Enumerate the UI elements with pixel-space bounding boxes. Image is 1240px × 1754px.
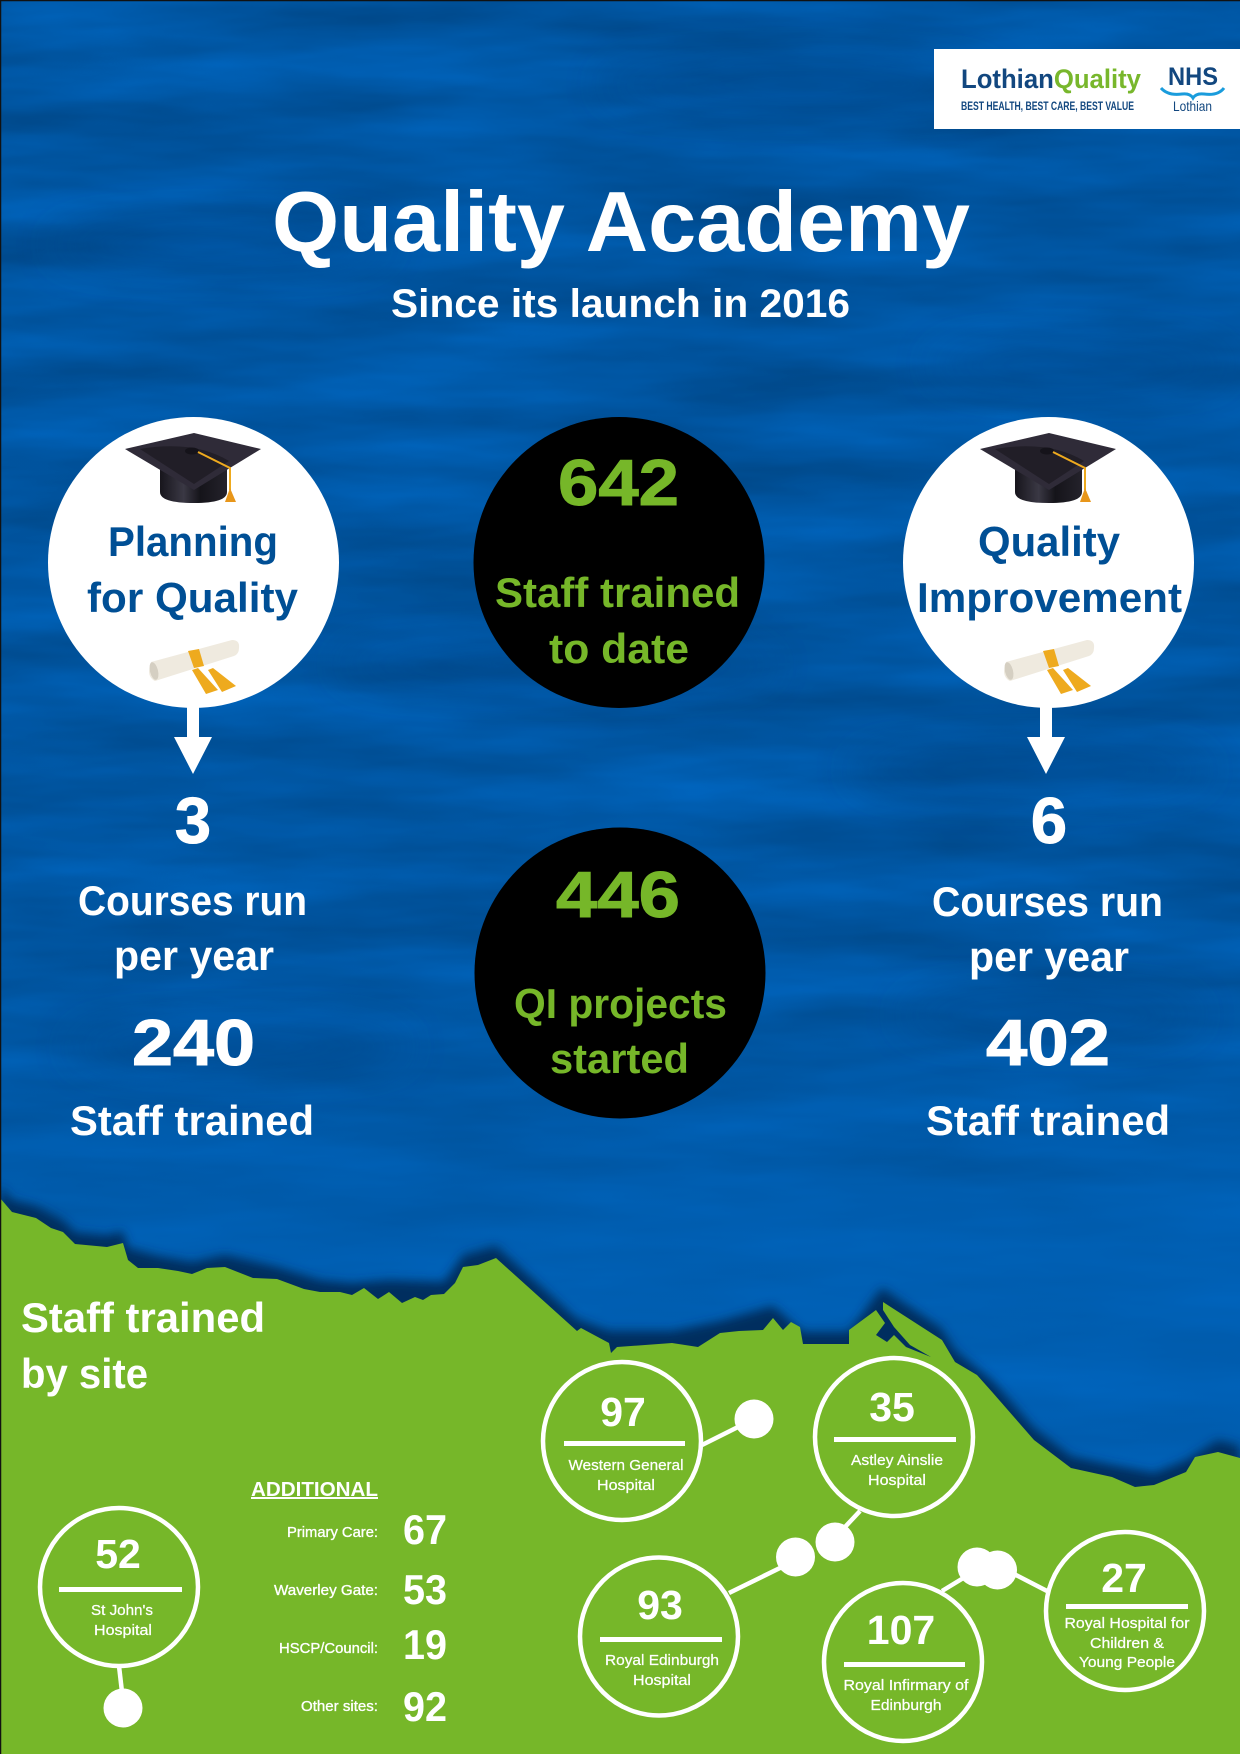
- site: Astley Ainslie Hospital: Astley Ainslie: [851, 1452, 943, 1469]
- row: Waverley Gate: [274, 1566, 447, 1613]
- logo: wave: [1161, 88, 1224, 98]
- site: St John's Hospital: [40, 1508, 198, 1728]
- row: Primary Care: [287, 1506, 447, 1553]
- label: courses run per year: Courses run: [932, 878, 1163, 925]
- label: Staff trained to date: to date: [549, 625, 689, 672]
- row: Primary Care: 67: [403, 1506, 447, 1553]
- heading: ADDITIONAL: ADDITIONAL: [251, 1479, 378, 1501]
- site: Astley Ainslie Hospital: Hospital: [868, 1472, 926, 1489]
- site: St John's Hospital: 52: [95, 1531, 141, 1577]
- label: QI projects started: started: [550, 1035, 689, 1082]
- logo panel: [934, 49, 1240, 129]
- site: Astley Ainslie Hospital: [815, 1358, 973, 1562]
- site: St John's Hospital: Hospital: [94, 1622, 152, 1639]
- icon: diploma scroll: [1003, 640, 1094, 694]
- row: Other sites: [301, 1683, 447, 1730]
- logo: tagline: BEST HEALTH, BEST CARE, BEST VALUE: [961, 101, 1134, 113]
- site: Western General Hospital: 97: [600, 1389, 646, 1435]
- coastline shadow: [0, 1186, 1240, 1500]
- site: Royal Infirmary of Edinburgh: Royal Infirmary of: [844, 1677, 969, 1694]
- label: staff trained: Staff trained: [70, 1097, 314, 1144]
- label: staff trained: Staff trained: [926, 1097, 1170, 1144]
- row: Waverley Gate: 53: [403, 1566, 447, 1613]
- site: Royal Edinburgh Hospital: [580, 1538, 815, 1716]
- site: Royal Hospital for Children and Young People: Royal Hospital for: [1064, 1615, 1190, 1632]
- site: Astley Ainslie Hospital: 35: [869, 1384, 915, 1430]
- text block: Quality Improvement stats: [926, 784, 1170, 1144]
- row: Other sites: 92: [403, 1683, 447, 1730]
- label: Staff trained to date: Staff trained: [495, 569, 740, 616]
- site: Royal Infirmary of Edinburgh: Edinburgh: [870, 1697, 942, 1714]
- label: courses run per year: per year: [114, 932, 274, 979]
- site: Royal Infirmary of Edinburgh: 107: [867, 1607, 935, 1653]
- label: courses run per year: Courses run: [78, 877, 307, 924]
- site: St John's Hospital: St John's: [91, 1602, 153, 1619]
- logo: Lothian Quality wordmark: LothianQuality: [961, 64, 1141, 94]
- number: 446: 446: [556, 858, 680, 931]
- arrow: right down: [1027, 707, 1065, 774]
- site: Royal Edinburgh Hospital: 93: [637, 1582, 683, 1628]
- logo: Lothian label: Lothian: [1173, 98, 1212, 114]
- panel: QI projects started: [474, 828, 766, 1118]
- site: Royal Hospital for Children and Young People: Children &: [1090, 1635, 1164, 1652]
- row: HSCP/Council: HSCP/Council:: [279, 1640, 378, 1657]
- icon: diploma scroll: [148, 640, 239, 694]
- site: Western General Hospital: Hospital: [597, 1477, 655, 1494]
- panel: Planning for Quality: [48, 417, 339, 708]
- number: 240: 240: [132, 1006, 255, 1079]
- arrow: left down: [174, 707, 212, 774]
- subtitle: Since its launch in 2016: [391, 282, 850, 326]
- heading: Staff trained by site: Staff trained: [21, 1294, 265, 1341]
- number: 402: 402: [986, 1006, 1110, 1079]
- additional sites list: [251, 1479, 447, 1730]
- row: Waverley Gate: Waverley Gate:: [274, 1582, 378, 1599]
- panel: staff trained to date: [474, 417, 764, 708]
- heading: Quality Improvement: Quality: [978, 518, 1121, 565]
- site: Royal Edinburgh Hospital: Hospital: [633, 1672, 691, 1689]
- heading: Staff trained by site: by site: [21, 1350, 148, 1397]
- row: Primary Care: Primary Care:: [287, 1524, 378, 1541]
- panel: Quality Improvement: [903, 417, 1194, 708]
- text block: Planning for Quality stats: [70, 784, 314, 1144]
- row: HSCP/Council: [279, 1621, 447, 1668]
- heading: Planning for Quality: for Quality: [87, 574, 299, 621]
- icon: graduation cap: [125, 433, 261, 503]
- logo: NHS mark: NHS: [1168, 63, 1218, 91]
- label: courses run per year: per year: [969, 933, 1129, 980]
- heading: Quality Improvement: Improvement: [917, 574, 1182, 621]
- text block: Quality Improvement stats: 6: [1031, 784, 1067, 857]
- green land: [0, 1198, 1240, 1754]
- title: Quality Academy: [272, 175, 970, 270]
- row: HSCP/Council: 19: [403, 1621, 447, 1668]
- site: Royal Edinburgh Hospital: Royal Edinburgh: [605, 1652, 719, 1669]
- site: Royal Hospital for Children and Young People: Young People: [1079, 1654, 1175, 1671]
- site: Royal Infirmary of Edinburgh: [824, 1548, 996, 1741]
- number: 642: 642: [558, 446, 679, 519]
- site: Western General Hospital: [543, 1362, 774, 1520]
- heading: Planning for Quality: Planning: [108, 518, 278, 565]
- label: QI projects started: QI projects: [514, 980, 727, 1027]
- site: Royal Hospital for Children and Young People: 27: [1101, 1555, 1147, 1601]
- site: Western General Hospital: Western General: [568, 1457, 684, 1474]
- row: Other sites: Other sites:: [301, 1698, 378, 1715]
- site: Royal Hospital for Children and Young People: [978, 1532, 1204, 1690]
- icon: graduation cap: [980, 433, 1116, 503]
- text block: Planning for Quality stats: 3: [175, 784, 211, 857]
